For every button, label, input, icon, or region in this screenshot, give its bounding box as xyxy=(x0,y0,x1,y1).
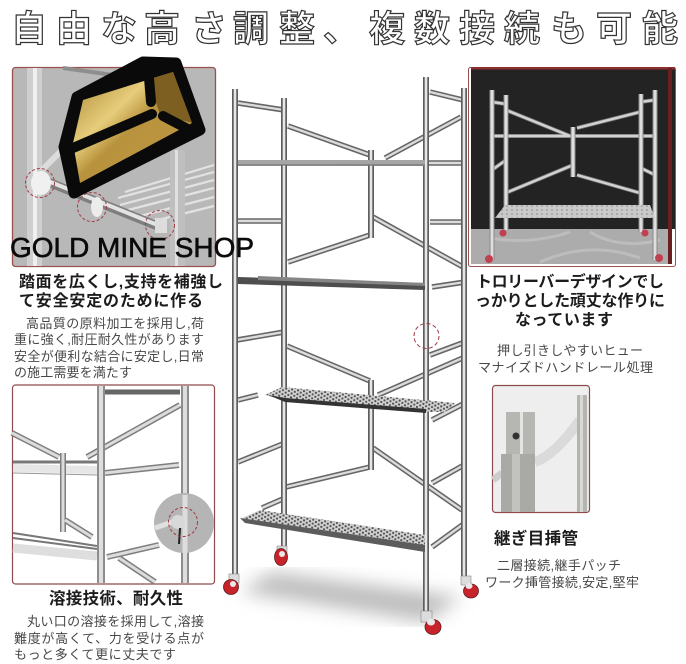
heading: welding: 溶接技術、耐久性 xyxy=(49,589,183,608)
third platform xyxy=(265,387,455,413)
text: deck description xyxy=(14,316,204,380)
scaffold frame tubes xyxy=(235,77,465,613)
heading: deck: 踏面を広くし,支持を補強し xyxy=(19,272,223,291)
heading: trolley bar: っかりとした頑丈な作りに xyxy=(475,292,665,310)
upper platform xyxy=(238,160,425,166)
heading: joint: 継ぎ目挿管 xyxy=(494,528,578,548)
heading: trolley bar: トロリーバーデザインでし xyxy=(476,272,664,291)
text: trolley description: マナイズドハンドレール処理 xyxy=(478,360,653,375)
text: welding description xyxy=(14,614,204,662)
panel: welding photo xyxy=(12,385,214,584)
text: deck description: の施工需要を満たす xyxy=(14,365,132,380)
panel: deck and support photo xyxy=(12,68,216,266)
text: welding description: 難度が高くて、力を受ける点が xyxy=(14,631,204,646)
panel: joint insert photo xyxy=(492,386,590,512)
heading: deck: て安全安定のために作る xyxy=(19,291,203,310)
floor shadow xyxy=(240,572,462,622)
text: joint description: 二層接続,継手パッチ xyxy=(497,558,621,573)
text: trolley description xyxy=(478,343,653,375)
text: deck description: 高品質の原料加工を採用し,荷 xyxy=(26,316,204,331)
second platform xyxy=(238,276,425,290)
panel: scaffold on dark background xyxy=(468,67,676,266)
text: deck description: 重に強く,耐圧耐久性があります xyxy=(14,332,204,347)
heading: trolley bar: なっています xyxy=(515,311,613,329)
heading: trolley bar xyxy=(475,272,665,329)
logo wordmark: GOLD MINE SHOP xyxy=(10,232,254,263)
bottom platform xyxy=(240,510,425,552)
heading: deck xyxy=(19,272,223,310)
title: 自由な高さ調整、複数接続も可能 xyxy=(11,8,678,49)
text: joint description: ワーク挿管接続,安定,堅牢 xyxy=(485,575,639,590)
text: welding description: 丸い口の溶接を採用して,溶接 xyxy=(27,614,204,629)
main scaffold tower xyxy=(224,77,478,634)
text: deck description: 安全が便利な結合に安定し,日常 xyxy=(14,349,204,364)
casters xyxy=(224,546,478,634)
text: welding description: もっと多くて更に丈夫です xyxy=(14,647,176,662)
detail marker circle xyxy=(414,324,439,348)
logo: gold bar xyxy=(64,62,200,193)
text: trolley description: 押し引きしやすいヒュー xyxy=(497,343,643,358)
text: joint description xyxy=(485,558,639,590)
